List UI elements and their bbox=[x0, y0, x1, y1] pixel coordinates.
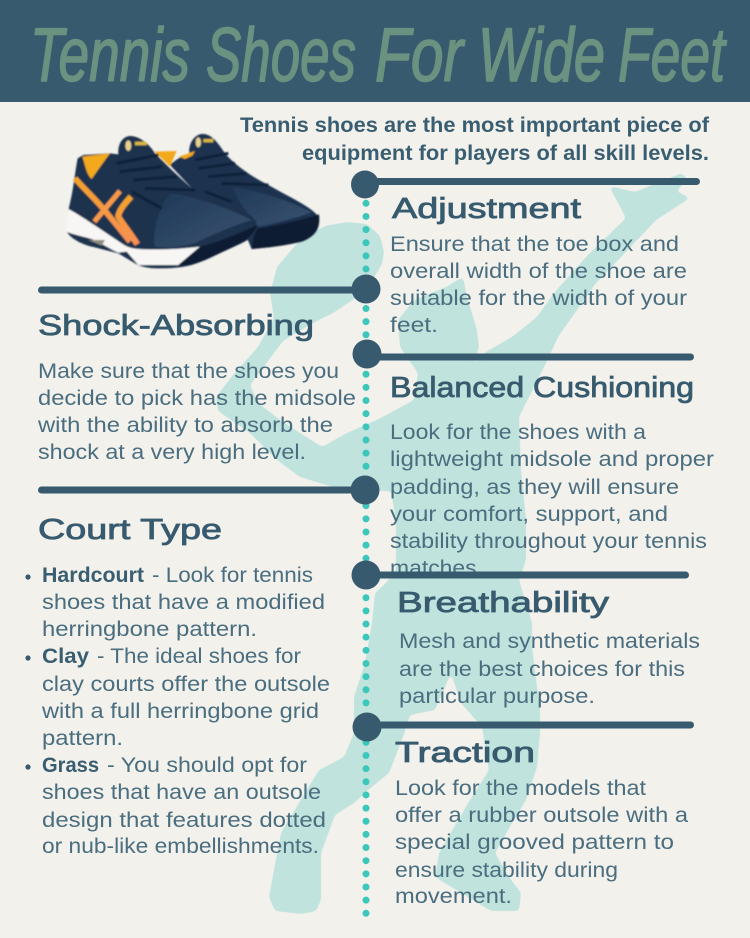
panel: adjustment bbox=[390, 193, 687, 337]
title: Tennis bbox=[30, 13, 190, 98]
list item: hardcourt: herringbone pattern. bbox=[42, 618, 257, 641]
list item: hardcourt bbox=[25, 564, 325, 641]
intro text: equipment for players of all skill levels. bbox=[302, 142, 709, 165]
intro text bbox=[240, 114, 710, 165]
text: balanced cushioning body: matches. bbox=[390, 557, 483, 580]
front shoe bbox=[66, 136, 257, 268]
title: Wide bbox=[478, 13, 605, 98]
text: shock-absorbing body bbox=[37, 360, 356, 464]
text: breathability body: Mesh and synthetic materials bbox=[399, 630, 700, 653]
background silhouette: tennis player bbox=[216, 173, 690, 914]
heading: balanced cushioning: Balanced Cushioning bbox=[390, 372, 694, 404]
list item: grass: Grass bbox=[42, 754, 99, 777]
panel: balanced cushioning bbox=[390, 372, 714, 580]
heading: breathability: Breathability bbox=[397, 587, 610, 619]
list item: hardcourt: - Look for tennis bbox=[152, 564, 313, 587]
list item: clay: clay courts offer the outsole bbox=[42, 673, 330, 696]
text: breathability body: are the best choices for this bbox=[399, 658, 685, 681]
text: shock-absorbing body: decide to pick has the midsole bbox=[38, 387, 356, 410]
panel: shock-absorbing bbox=[37, 310, 356, 464]
text: breathability body bbox=[399, 630, 700, 708]
text: traction body: movement. bbox=[395, 885, 512, 908]
text: shock-absorbing body: shock at a very high level. bbox=[38, 441, 306, 464]
panel: court type bbox=[25, 514, 330, 858]
heading: traction: Traction bbox=[395, 737, 535, 769]
list item: clay: - The ideal shoes for bbox=[97, 645, 301, 668]
text: balanced cushioning body: stability throughout your tennis bbox=[390, 530, 707, 553]
text: traction body: Look for the models that bbox=[395, 777, 646, 800]
panel: traction bbox=[395, 737, 688, 908]
title: Shoes bbox=[206, 13, 356, 98]
list item: clay bbox=[25, 645, 330, 750]
back shoe bbox=[170, 134, 319, 249]
text: traction body: special grooved pattern to bbox=[395, 831, 674, 854]
list item: grass: design that features dotted bbox=[42, 809, 326, 832]
list item: grass: - You should opt for bbox=[107, 754, 307, 777]
text: breathability body: particular purpose. bbox=[399, 685, 595, 708]
text: adjustment body bbox=[390, 233, 687, 337]
list item: hardcourt: Hardcourt bbox=[42, 564, 144, 587]
heading: shock-absorbing: Shock-Absorbing bbox=[38, 310, 314, 342]
text: balanced cushioning body: padding, as they will ensure bbox=[390, 476, 679, 499]
text: traction body bbox=[395, 777, 688, 908]
list item: hardcourt: shoes that have a modified bbox=[42, 591, 325, 614]
text: adjustment body: overall width of the shoe are bbox=[390, 260, 687, 283]
title bbox=[30, 13, 727, 98]
list item: clay: Clay bbox=[42, 645, 89, 668]
connector 6: traction bbox=[352, 712, 694, 742]
heading: adjustment: Adjustment bbox=[392, 193, 581, 225]
connector 5: breathability bbox=[352, 560, 689, 590]
list item: grass bbox=[25, 754, 326, 858]
text: traction body: offer a rubber outsole with a bbox=[395, 804, 688, 827]
icon: tennis shoes photo bbox=[66, 134, 319, 268]
text: balanced cushioning body: your comfort, support, and bbox=[390, 503, 668, 526]
text: shock-absorbing body: with the ability to absorb the bbox=[37, 414, 333, 437]
list item: clay: with a full herringbone grid bbox=[41, 700, 319, 723]
text: traction body: ensure stability during bbox=[395, 859, 618, 882]
text: adjustment body: Ensure that the toe box and bbox=[390, 233, 679, 256]
connector 4: court type bbox=[38, 476, 380, 504]
connector 1: adjustment bbox=[351, 170, 700, 198]
text: balanced cushioning body: Look for the shoes with a bbox=[390, 421, 646, 444]
connector 3: balanced cushioning bbox=[352, 340, 694, 368]
text: balanced cushioning body bbox=[390, 421, 714, 580]
list item: clay: pattern. bbox=[42, 727, 123, 750]
header banner bbox=[0, 0, 750, 102]
list item: grass: shoes that have an outsole bbox=[42, 781, 321, 804]
list item: grass: or nub-like embellishments. bbox=[42, 835, 319, 858]
title: For bbox=[375, 13, 465, 98]
connector 2: shock-absorbing bbox=[38, 274, 380, 304]
dotted timeline spine bbox=[362, 203, 370, 914]
text: adjustment body: suitable for the width of your bbox=[390, 287, 687, 310]
text: balanced cushioning body: lightweight midsole and proper bbox=[390, 448, 714, 471]
text: shock-absorbing body: Make sure that the shoes you bbox=[38, 360, 339, 383]
intro text: Tennis shoes are the most important piece of bbox=[240, 114, 710, 137]
text: adjustment body: feet. bbox=[390, 314, 438, 337]
panel: breathability bbox=[397, 587, 700, 708]
heading: court type: Court Type bbox=[38, 514, 222, 546]
